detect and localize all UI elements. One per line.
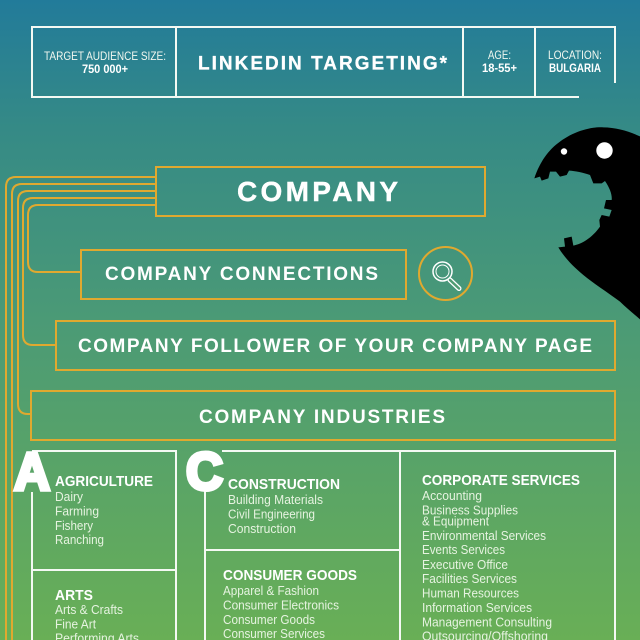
icon: magnifying glass in circle bbox=[419, 247, 472, 300]
consumer goods list: Consumer Electronics bbox=[223, 598, 339, 612]
box: company bbox=[156, 167, 485, 216]
audience size: 750 000+ bbox=[82, 64, 128, 76]
age bbox=[482, 48, 517, 75]
connector lines bbox=[6, 177, 155, 640]
company heading: COMPANY bbox=[237, 176, 398, 207]
consumer goods list: CONSUMER GOODS bbox=[223, 567, 357, 584]
header title: LINKEDIN TARGETING* bbox=[198, 54, 448, 74]
agriculture list: Dairy bbox=[55, 490, 84, 504]
corporate services list: Information Services bbox=[422, 601, 532, 615]
agriculture list: Farming bbox=[55, 504, 99, 518]
arts list: Fine Art bbox=[55, 618, 96, 632]
panel: industries A bbox=[14, 443, 176, 640]
location: LOCATION: bbox=[548, 48, 602, 62]
audience size: TARGET AUDIENCE SIZE: bbox=[44, 49, 166, 63]
monster eye large bbox=[596, 142, 613, 159]
panel: industries C bbox=[186, 442, 615, 640]
corporate services list: Management Consulting bbox=[422, 616, 552, 630]
corporate services list: Accounting bbox=[422, 489, 482, 503]
box: company follower bbox=[56, 321, 615, 370]
location: BULGARIA bbox=[549, 63, 601, 75]
construction list: Civil Engineering bbox=[228, 508, 315, 522]
box: company connections bbox=[81, 250, 406, 299]
consumer goods list: Apparel & Fashion bbox=[223, 584, 319, 598]
corporate services list: CORPORATE SERVICES bbox=[422, 472, 580, 489]
arts list: Arts & Crafts bbox=[55, 603, 123, 617]
agriculture list: Fishery bbox=[55, 519, 94, 533]
corporate services list: Business Supplies bbox=[422, 504, 518, 518]
construction list: Building Materials bbox=[228, 493, 323, 507]
corporate services list: Events Services bbox=[422, 543, 505, 557]
agriculture list: AGRICULTURE bbox=[55, 473, 153, 490]
agriculture list bbox=[55, 473, 153, 547]
company industries label: COMPANY INDUSTRIES bbox=[199, 407, 445, 428]
agriculture list: Ranching bbox=[55, 533, 104, 547]
corporate services list: Environmental Services bbox=[422, 529, 546, 543]
company follower label: COMPANY FOLLOWER OF YOUR COMPANY PAGE bbox=[78, 336, 592, 357]
corporate services list: Facilities Services bbox=[422, 572, 517, 586]
age: AGE: bbox=[488, 48, 511, 62]
arts list: ARTS bbox=[55, 587, 93, 604]
age: 18-55+ bbox=[482, 63, 517, 75]
corporate services list bbox=[422, 472, 580, 640]
header panel: targeting summary bbox=[32, 27, 615, 97]
construction list: CONSTRUCTION bbox=[228, 476, 340, 493]
location bbox=[548, 48, 602, 75]
icon: black monster silhouette bbox=[534, 127, 640, 320]
letter A: A bbox=[14, 443, 50, 502]
consumer goods list: Consumer Goods bbox=[223, 613, 315, 627]
letter C: C bbox=[186, 442, 223, 502]
company connections label: COMPANY CONNECTIONS bbox=[105, 264, 378, 285]
arts list bbox=[55, 587, 139, 640]
monster eye small bbox=[561, 148, 567, 155]
corporate services list: Human Resources bbox=[422, 586, 519, 600]
corporate services list: Executive Office bbox=[422, 558, 508, 572]
audience size bbox=[44, 49, 166, 76]
construction list bbox=[228, 476, 340, 536]
box: company industries bbox=[31, 391, 615, 440]
consumer goods list bbox=[223, 567, 357, 640]
construction list: Construction bbox=[228, 522, 296, 536]
corporate services list: & Equipment bbox=[422, 514, 489, 528]
